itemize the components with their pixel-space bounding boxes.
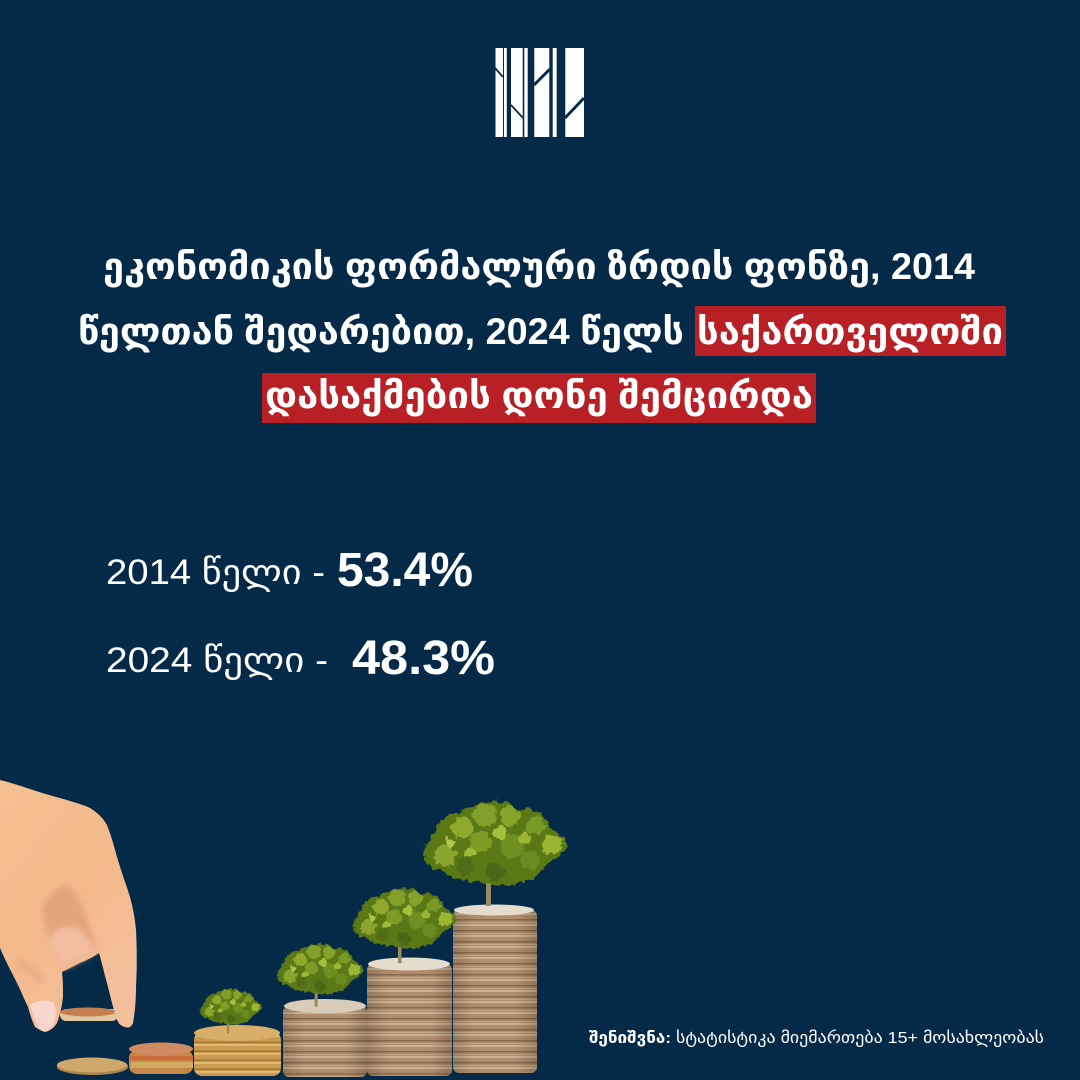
- title line 1: ეკონომიკის ფორმალური ზრდის ფონზე, 2014: [103, 246, 975, 288]
- highlight: line 2: [695, 306, 1006, 356]
- tree 3: [353, 888, 456, 963]
- coin stack 3: [194, 1025, 281, 1076]
- coin stack 5: [367, 958, 452, 1076]
- palm cavity shadow: [42, 885, 97, 968]
- stat: 2014: 53.4%: [337, 544, 473, 597]
- stat: 2024: [106, 632, 495, 685]
- coin: single on ground: [57, 1058, 128, 1075]
- stat: 2024: 2024 წელი -: [106, 641, 328, 680]
- illustration: hand with coins and trees: [0, 780, 566, 1077]
- knuckle wrinkles: [17, 962, 42, 982]
- curled finger: [48, 926, 96, 968]
- fingernail: thumb: [30, 1001, 56, 1031]
- coin stack 4: [283, 999, 367, 1077]
- title: [78, 246, 1006, 423]
- logo: [495, 48, 584, 137]
- title line 2: წელთან შედარებით, 2024 წელს: [78, 311, 684, 353]
- highlight: line 3: [262, 373, 816, 423]
- coin stack 2: [129, 1042, 193, 1074]
- hand: [0, 780, 137, 1032]
- tree 4: [424, 801, 566, 906]
- stat: 2024: 48.3%: [352, 632, 495, 685]
- coin: held: [60, 1008, 118, 1021]
- coin stack 6: [453, 904, 537, 1073]
- stat: 2014: 2014 წელი -: [106, 553, 325, 592]
- title line 3: დასაქმების დონე შემცირდა: [265, 375, 813, 417]
- note: შენიშვნა:: [589, 1030, 671, 1047]
- title line 2 highlighted: საქართველოში: [697, 311, 1003, 353]
- note: [589, 1029, 1044, 1047]
- tree 1: [200, 988, 261, 1034]
- note: სტატისტიკა მიემართება 15+ მოსახლეობას: [676, 1029, 1044, 1047]
- tree 2: [277, 943, 363, 1007]
- stat: 2014: [106, 544, 473, 597]
